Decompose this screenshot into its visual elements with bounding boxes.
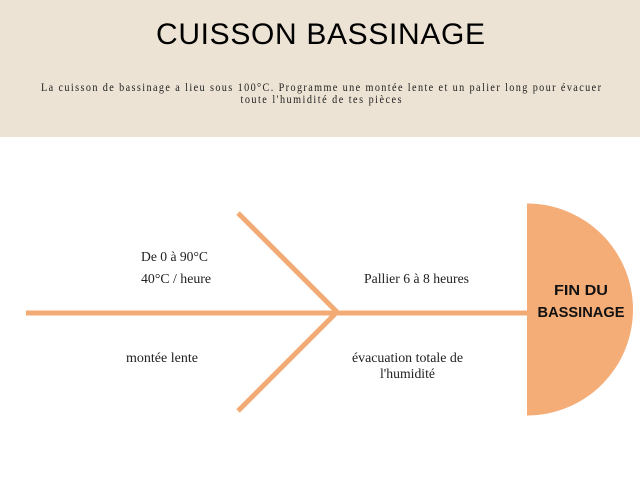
label: temperature range: De 0 à 90°C [141,250,208,265]
half circle label: FIN DU [554,282,608,299]
half circle: fin du bassinage [527,204,633,416]
label: évacuation [352,351,463,382]
fishbone diagram lines [26,213,530,411]
intro text [41,81,601,106]
intro text: toute l'humidité de tes pièces [241,93,401,106]
intro text: La cuisson de bassinage a lieu sous 100°C. Programme une montée lente et un palier long pour évacuer [41,81,601,94]
label: évacuation: l'humidité [380,367,435,382]
label: temperature range: 40°C / heure [141,272,211,287]
half circle label [538,282,624,321]
half circle label: BASSINAGE [538,304,624,321]
label: temperature range [141,250,211,287]
label: évacuation: évacuation totale de [352,351,463,366]
label: palier: Pallier 6 à 8 heures [364,272,469,287]
title: CUISSON BASSINAGE [156,18,485,51]
label: montée lente: montée lente [126,351,198,366]
header panel [0,0,640,137]
